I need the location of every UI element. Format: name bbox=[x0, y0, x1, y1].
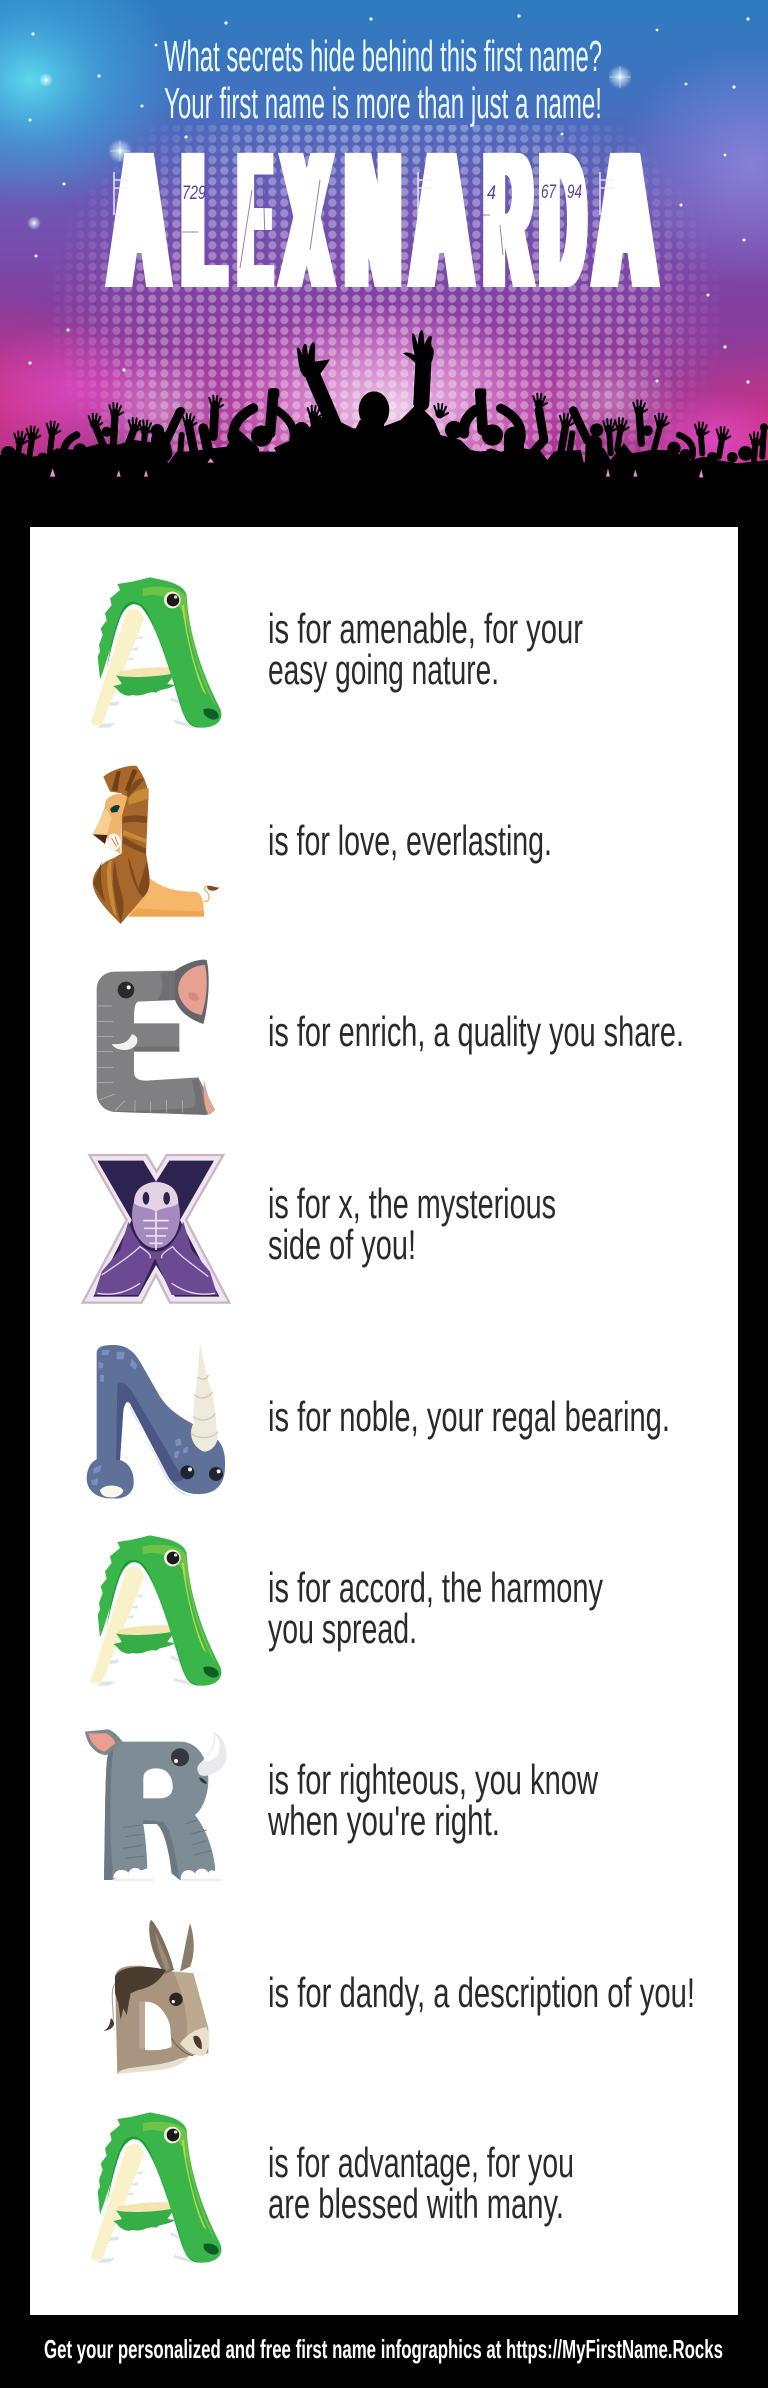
row: letter N, noble bbox=[87, 1343, 670, 1499]
title distress marks bbox=[113, 172, 614, 268]
row: letter X, x bbox=[83, 1155, 556, 1303]
icon: crocodile letter A bbox=[91, 577, 221, 728]
title: ALEXNARDA: N bbox=[340, 111, 392, 329]
text: amenable: easy going nature. bbox=[268, 646, 499, 693]
white panel background bbox=[30, 527, 738, 2315]
icon: narwhal letter N bbox=[87, 1343, 225, 1499]
row: letter D, dandy bbox=[103, 1920, 695, 2074]
title distress marks: 67 bbox=[541, 182, 557, 203]
row: letter A, amenable bbox=[91, 577, 583, 728]
text: righteous: when you're right. bbox=[267, 1797, 500, 1844]
title: ALEXNARDA: E bbox=[234, 111, 266, 329]
title: ALEXNARDA: X bbox=[276, 111, 323, 329]
row: letter L, love bbox=[93, 766, 552, 924]
icon: fish skeleton letter X bbox=[83, 1155, 229, 1303]
text: advantage: are blessed with many. bbox=[268, 2180, 564, 2227]
text: accord bbox=[268, 1564, 603, 1652]
row: letter A, advantage bbox=[91, 2112, 574, 2263]
title distress marks: 94 bbox=[567, 182, 582, 203]
sparkling stars bbox=[27, 14, 750, 384]
icon: crocodile letter A bbox=[91, 2112, 221, 2263]
icon: elephant letter E bbox=[97, 960, 215, 1115]
text: x: is for x, the mysterious bbox=[268, 1180, 556, 1227]
tagline bbox=[164, 32, 602, 128]
icon: donkey letter D bbox=[103, 1920, 209, 2074]
title distress marks: 729 bbox=[182, 183, 206, 204]
text: advantage bbox=[268, 2139, 574, 2227]
text: righteous bbox=[267, 1756, 598, 1844]
text: advantage: is for advantage, for you bbox=[268, 2139, 574, 2186]
title: ALEXNARDA bbox=[103, 111, 660, 329]
text: x bbox=[268, 1180, 556, 1268]
title: ALEXNARDA: A bbox=[103, 111, 159, 329]
icon: crocodile letter A bbox=[91, 1535, 221, 1686]
row: letter A, accord bbox=[91, 1535, 603, 1686]
title: ALEXNARDA: A bbox=[588, 111, 646, 329]
row: letter R, righteous bbox=[85, 1729, 598, 1881]
row: letter E, enrich bbox=[97, 960, 684, 1115]
header background with crowd bbox=[0, 0, 768, 478]
title: ALEXNARDA: D bbox=[535, 111, 578, 329]
title: ALEXNARDA: L bbox=[177, 111, 218, 329]
icon: rhino letter R bbox=[85, 1729, 227, 1881]
crowd: right half bbox=[374, 330, 768, 497]
text: amenable: is for amenable, for your bbox=[268, 605, 583, 652]
crowd: left half bbox=[0, 342, 389, 497]
icon: lion letter L bbox=[93, 766, 219, 924]
text: righteous: is for righteous, you know bbox=[268, 1756, 598, 1803]
title distress marks: 4 bbox=[487, 183, 496, 204]
title: ALEXNARDA: A bbox=[405, 111, 462, 329]
title: ALEXNARDA: R bbox=[479, 111, 524, 329]
text: accord: you spread. bbox=[268, 1605, 417, 1652]
text: x: side of you! bbox=[268, 1221, 416, 1268]
crowd silhouette bbox=[0, 330, 768, 530]
text: amenable bbox=[268, 605, 583, 693]
text: love: is for love, everlasting. bbox=[268, 817, 552, 864]
text: accord: is for accord, the harmony bbox=[268, 1564, 603, 1611]
